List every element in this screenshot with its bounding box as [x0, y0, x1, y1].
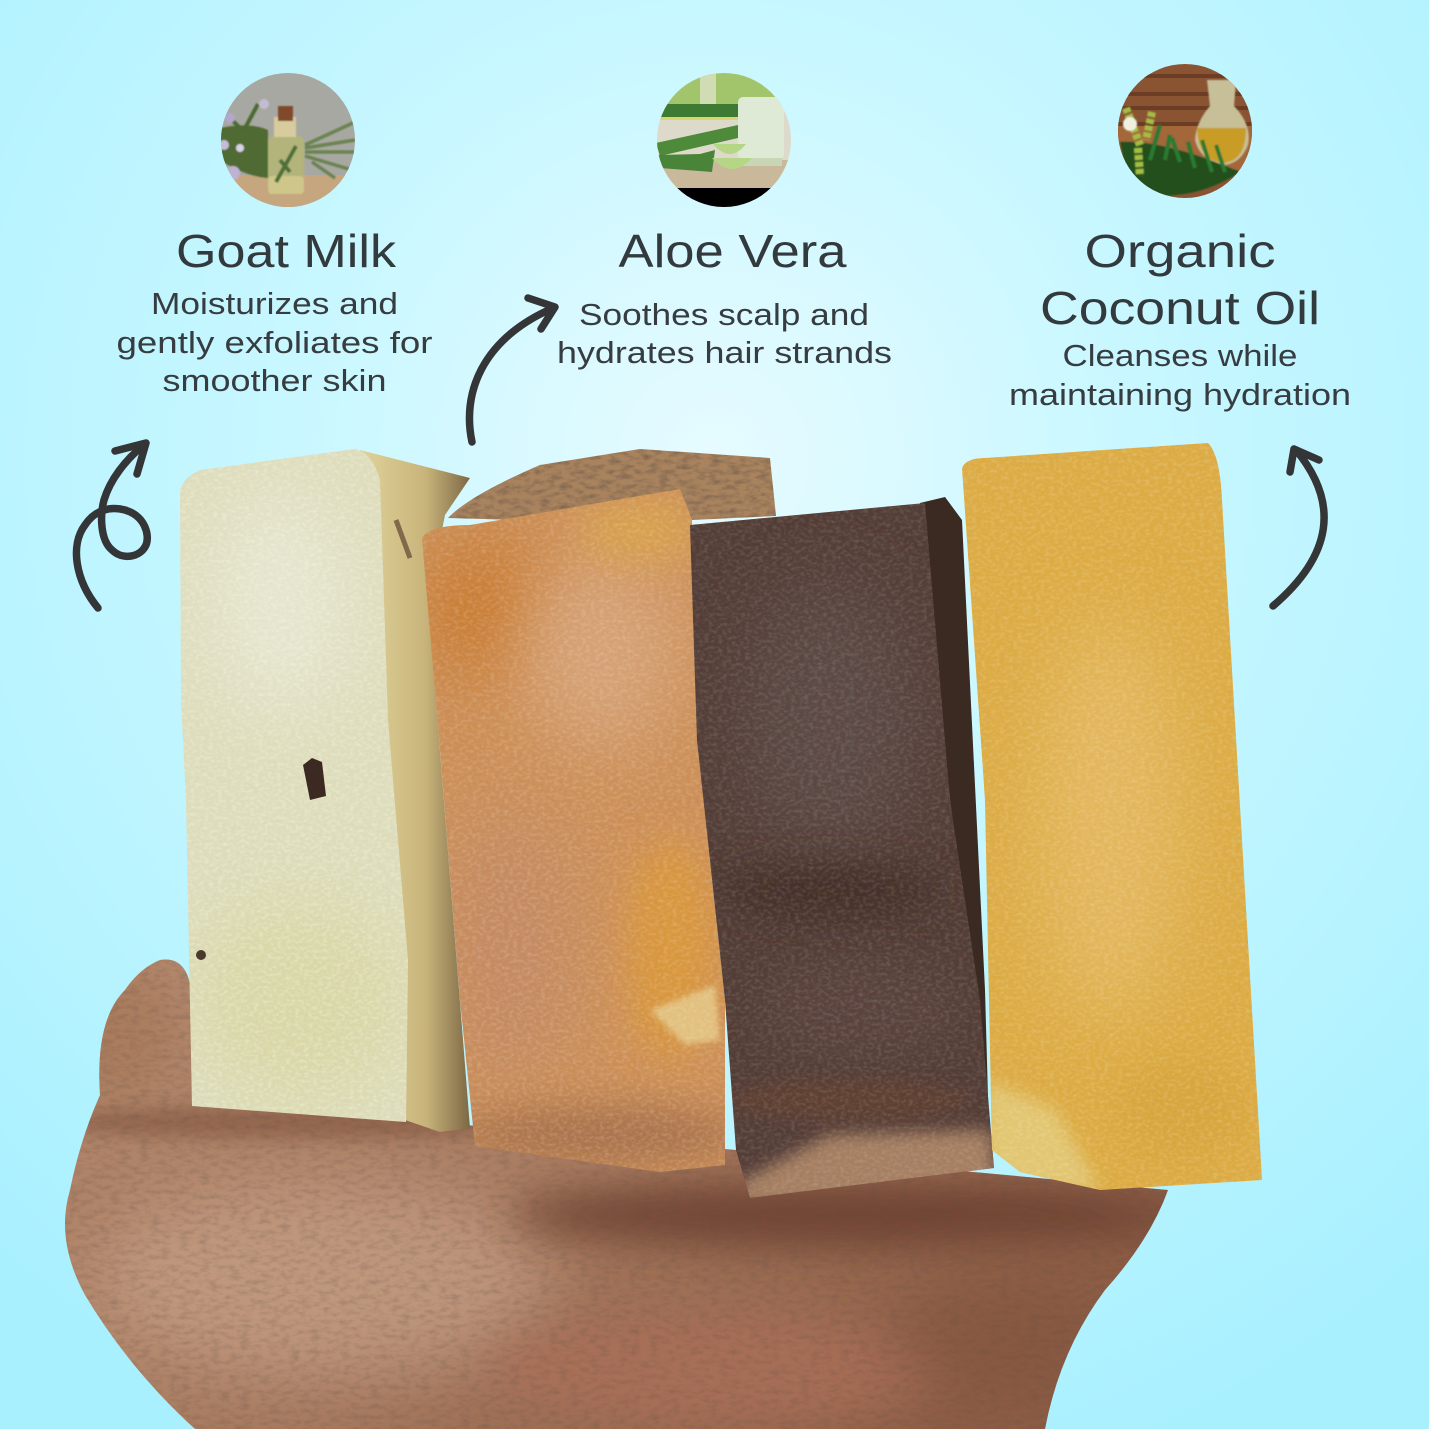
heading: Organic Coconut Oil	[1040, 225, 1320, 334]
arrow: loop left	[76, 443, 147, 608]
hand	[40, 940, 1190, 1429]
soap: coconut yellow	[955, 440, 1270, 1200]
text: aloe description: hydrates hair strands	[557, 335, 892, 370]
text: aloe description: Soothes scalp and	[579, 297, 869, 332]
text: aloe description	[557, 297, 892, 370]
soap: brown	[680, 495, 1000, 1205]
text: goat milk description	[116, 286, 432, 398]
heading: Organic Coconut Oil: Organic	[1084, 225, 1276, 277]
heading: Aloe Vera: Aloe Vera	[618, 225, 847, 277]
heading: Goat Milk: Goat Milk	[176, 225, 397, 277]
text: goat milk description: Moisturizes and	[151, 286, 398, 321]
icon: tea tree oil	[1116, 62, 1254, 200]
arrow: right curve	[1273, 449, 1324, 606]
text: coconut description: Cleanses while	[1062, 338, 1298, 373]
arrow: curve to aloe	[469, 298, 555, 442]
icon: aloe vera	[656, 72, 792, 210]
soap: orange	[422, 489, 725, 1172]
soap: orange back top	[448, 449, 776, 520]
text: coconut description	[1009, 338, 1351, 412]
text: goat milk description: gently exfoliates for	[116, 325, 432, 360]
text: coconut description: maintaining hydration	[1009, 377, 1351, 412]
icon: rosemary oil bottle	[219, 72, 356, 209]
heading: Organic Coconut Oil: Coconut Oil	[1040, 282, 1320, 334]
text: goat milk description: smoother skin	[162, 363, 386, 398]
soap: goat milk	[170, 440, 470, 1140]
